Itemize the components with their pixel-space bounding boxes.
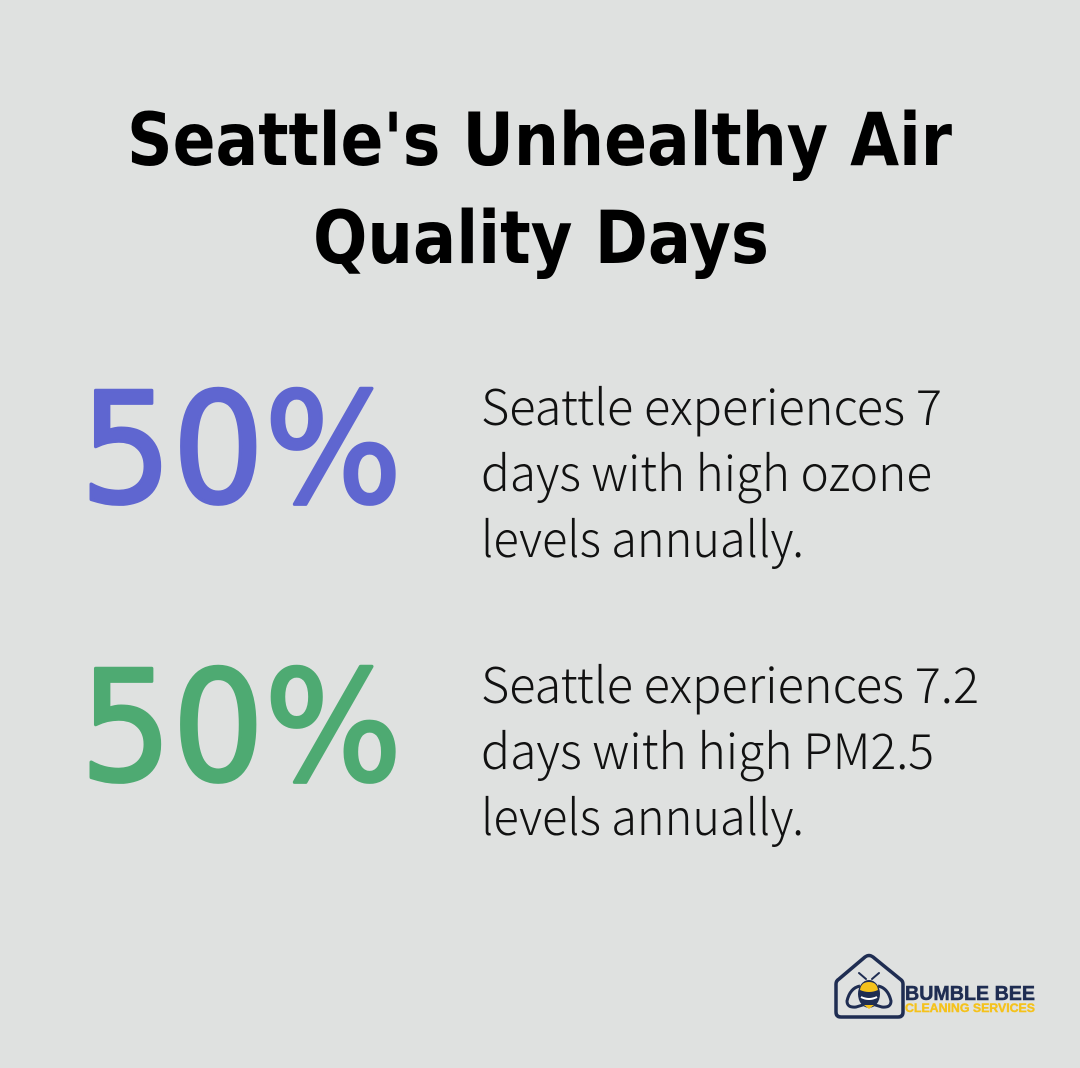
ozone percentage: 50% [80,361,402,539]
ozone description [481,369,942,572]
statistic: PM2.5 [80,639,979,850]
PM2.5 description [481,647,979,850]
PM2.5 description: Seattle experiences 7.2 [481,647,979,718]
logo wordmark: BUMBLE BEE [905,983,1035,1005]
icon: house with bee [836,956,903,1017]
PM2.5 percentage: 50% [80,639,402,817]
ozone description: levels annually. [481,501,804,572]
statistic: ozone [80,361,942,572]
title: Seattle's Unhealthy Air [127,98,952,183]
title: Quality Days [313,196,769,281]
PM2.5 description: levels annually. [481,779,804,850]
logo: Bumble Bee Cleaning Services [836,956,1035,1017]
ozone description: days with high ozone [481,435,932,506]
title [127,98,952,281]
PM2.5 description: days with high PM2.5 [481,713,934,784]
logo tagline: CLEANING SERVICES [905,1001,1035,1015]
ozone description: Seattle experiences 7 [481,369,942,440]
